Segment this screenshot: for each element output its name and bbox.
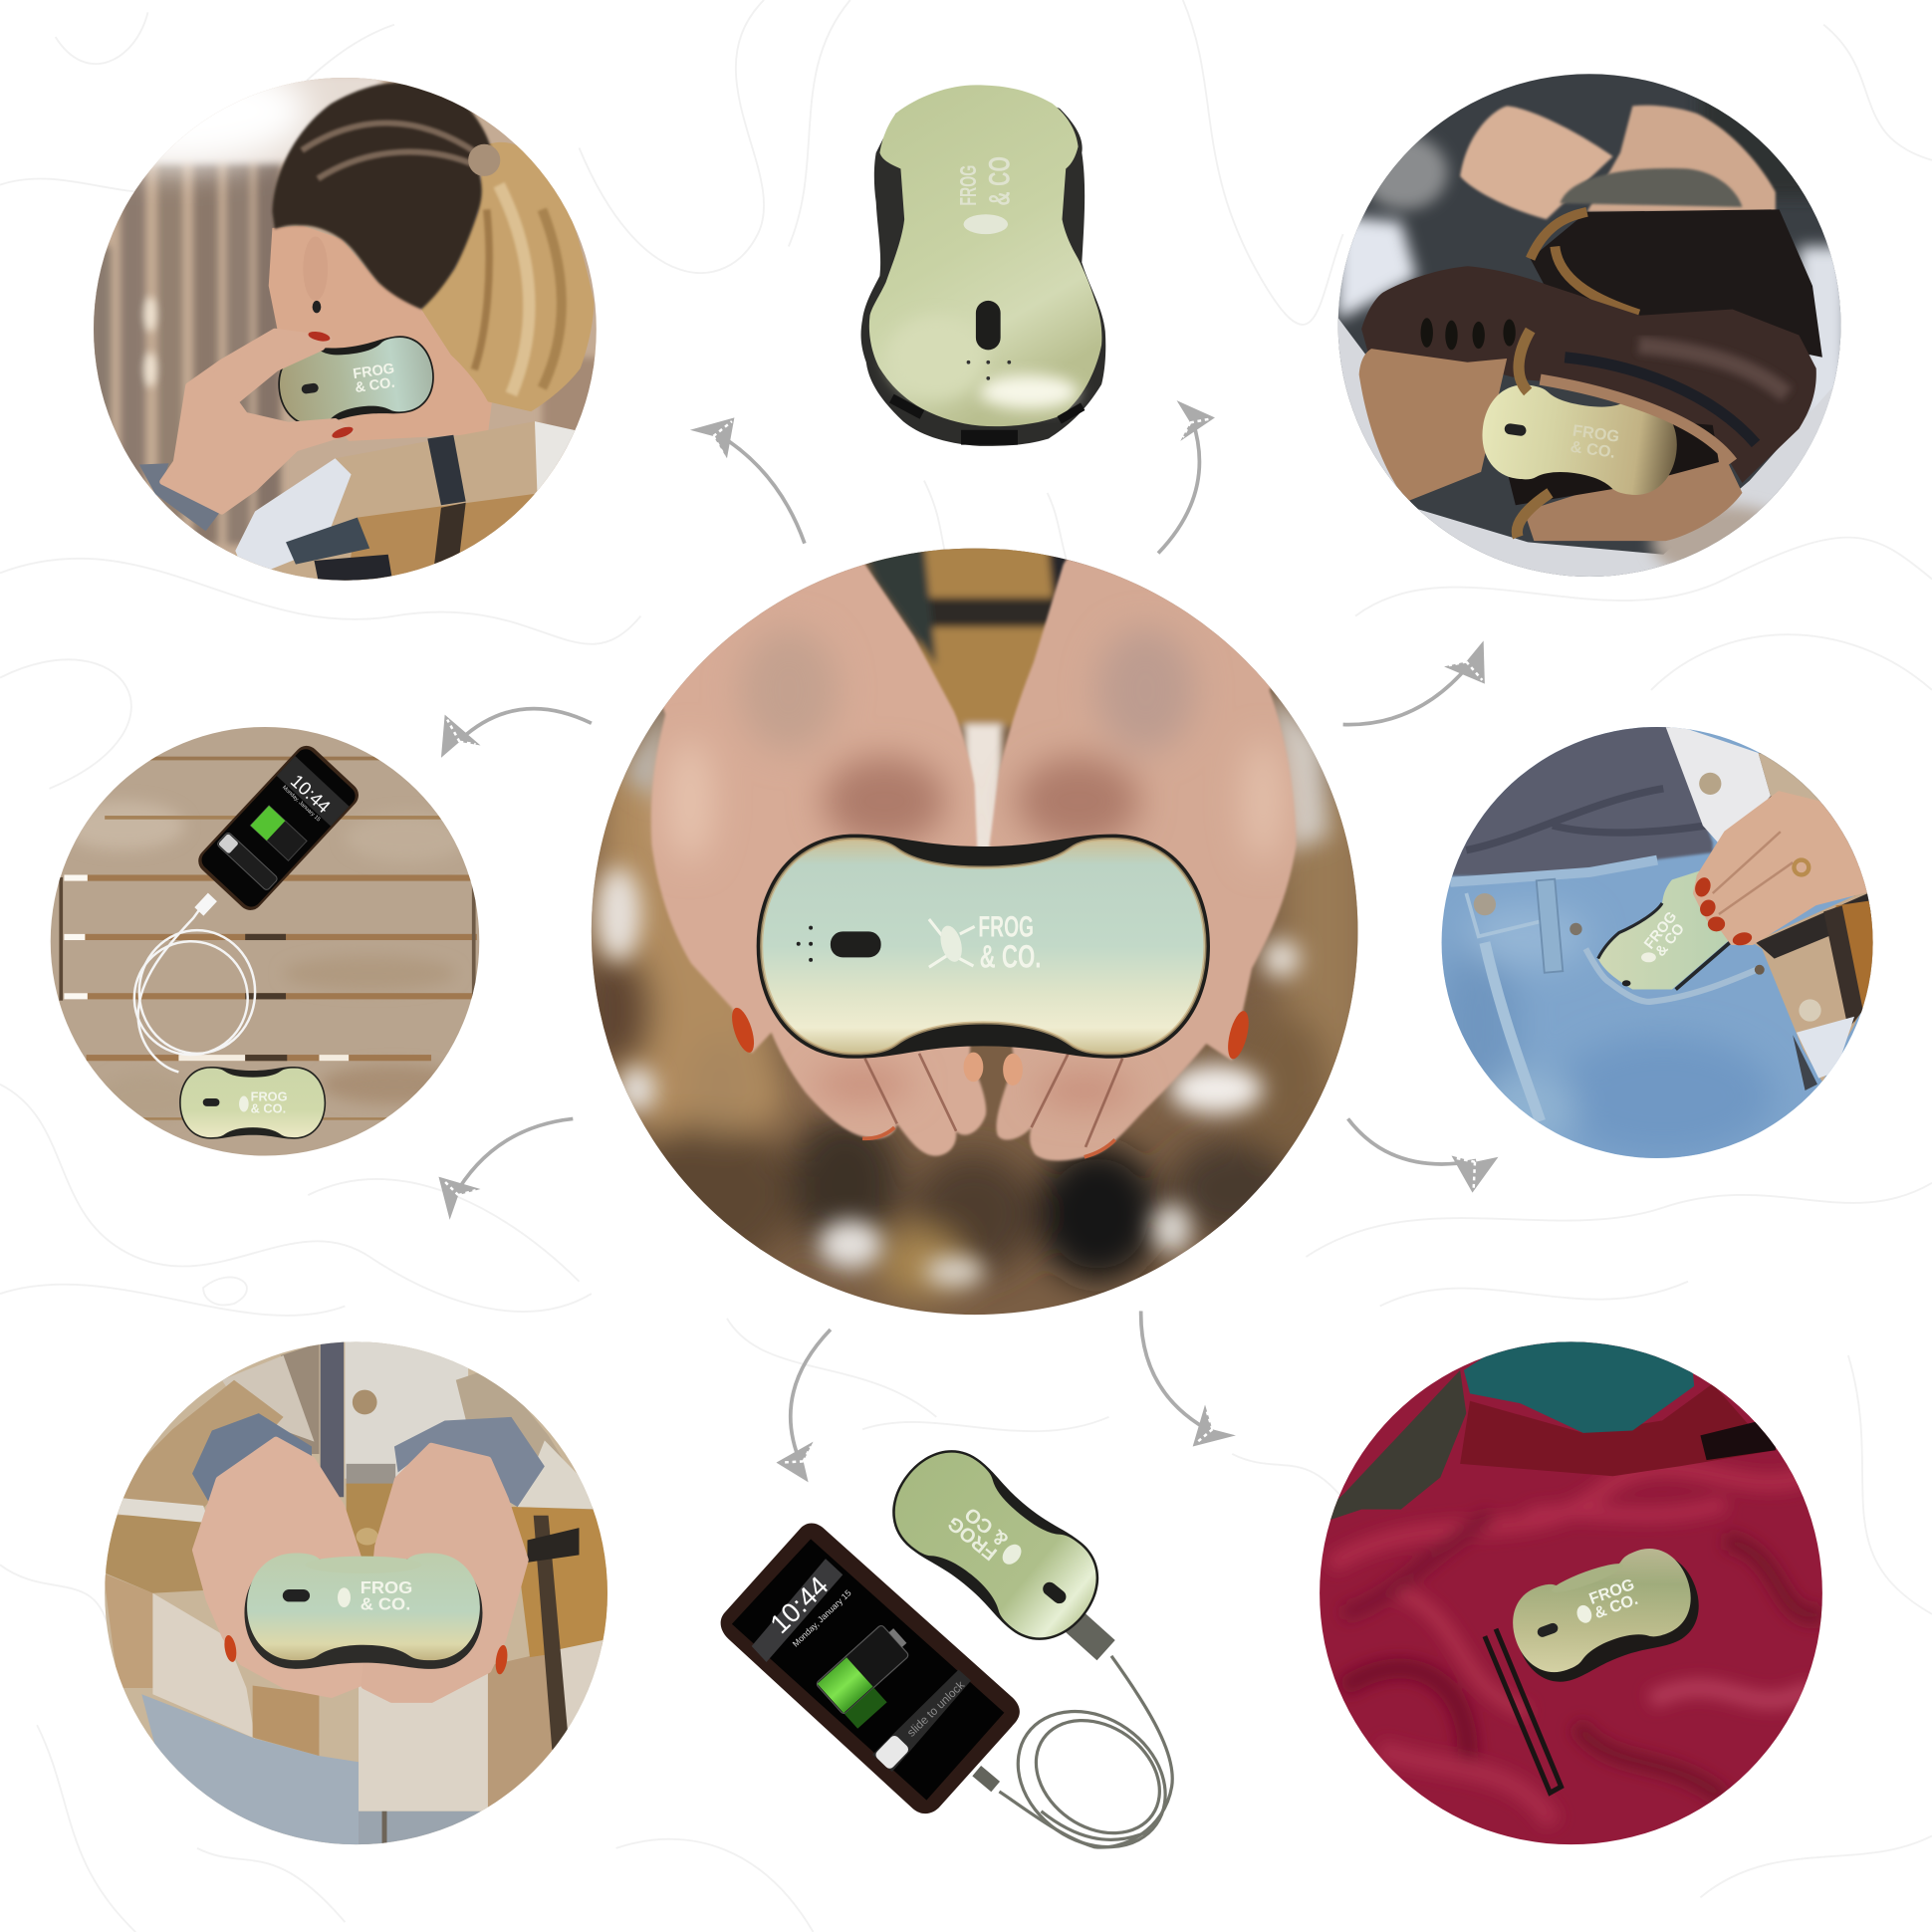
shirt center [345, 1336, 468, 1479]
logo: & CO. [980, 938, 1041, 974]
hand [162, 332, 352, 511]
arrow: center to sleeping bag [1141, 1311, 1236, 1447]
panel: warmer inside boots [1330, 68, 1848, 592]
logo: FROG [978, 910, 1034, 943]
insole left [1359, 349, 1507, 502]
button [976, 301, 1001, 350]
product: warmer in boot [1477, 379, 1683, 500]
panel: warmer in jeans pocket [1435, 721, 1885, 1164]
coat lower bands [104, 1510, 222, 1593]
product: warmer in boot: & CO. [1570, 438, 1616, 462]
unlock slider [873, 1734, 910, 1771]
tongues [1460, 106, 1613, 219]
arrow: center to hands [438, 1118, 573, 1220]
ponytail [421, 142, 594, 411]
panel: warmer in jeans pocket: FROG [1641, 909, 1680, 952]
right sleeve [456, 1367, 594, 1510]
panel: warmer in jeans pocket: & CO [1653, 921, 1688, 960]
jeans tone [1439, 905, 1775, 1158]
panel: warmer charging a phone [721, 1430, 1192, 1875]
cardigan [1663, 721, 1771, 847]
hand [1695, 794, 1868, 942]
arrow: center to charging [776, 1329, 831, 1482]
right hand [364, 1447, 525, 1699]
panel: center photo of hands holding warmer [580, 530, 1367, 1330]
upper boot [1531, 209, 1822, 358]
nails [732, 1008, 755, 1053]
strap [1485, 1629, 1562, 1793]
product: warmer on neck [278, 336, 434, 422]
fence [87, 74, 604, 545]
coat collar edge [535, 421, 576, 491]
blurred background [580, 727, 1367, 1298]
right hand [990, 530, 1306, 1161]
button [831, 931, 881, 957]
left hand [196, 1440, 362, 1694]
logo: & CO [983, 156, 1016, 206]
plaid coat behind [862, 542, 1085, 860]
product: warmer in hands: & CO. [361, 1594, 410, 1613]
product: warmer on bag: FROG [1586, 1575, 1637, 1608]
product: warmer on bag [1502, 1537, 1711, 1693]
panel: hands holding warmer in plaid coat [99, 1336, 616, 1860]
phone: slide to unlock [905, 1679, 967, 1740]
ear [303, 237, 328, 301]
product: warmer on table [179, 1067, 326, 1139]
arrow: center to boots [1343, 640, 1485, 725]
left sleeve [105, 1380, 284, 1516]
arrow: center to pocket [1348, 1118, 1498, 1193]
product: warmer on bag: & CO. [1592, 1590, 1640, 1622]
phone [721, 1524, 1020, 1813]
logo: FROG [955, 165, 981, 206]
plaid behind hand [1759, 753, 1885, 899]
neck and face [269, 225, 493, 441]
panel: warmer charging phone on wood table [43, 721, 493, 1170]
product: warmer in hands: FROG [361, 1577, 412, 1597]
plaid top [1759, 753, 1823, 814]
product: warmer in pocket [1598, 869, 1742, 990]
logo [928, 916, 1040, 968]
cuffs [192, 1413, 312, 1503]
phone: 10:44 [287, 770, 335, 817]
product: hand warmer [757, 835, 1210, 1059]
shirt [1435, 721, 1713, 887]
product: warmer on table: FROG [251, 1088, 288, 1103]
panel: warmer on red sleeping bag [1306, 1336, 1829, 1854]
phone: Monday, January 15 [281, 785, 322, 823]
product: warmer on neck: & CO. [354, 375, 396, 396]
left hand [640, 530, 986, 1156]
device: FROG [943, 1512, 1002, 1565]
logo [955, 156, 1016, 206]
product: warmer on table: & CO. [251, 1100, 286, 1115]
cable [119, 895, 264, 1072]
battery icon [816, 1620, 927, 1730]
laces [1517, 331, 1550, 537]
time: 10:44 [764, 1570, 835, 1639]
plank gaps [59, 757, 477, 1120]
nails [223, 1634, 238, 1663]
product: warmer on neck: FROG [352, 361, 395, 382]
panel: warmer at neck [94, 78, 597, 581]
arrow: center to table [441, 709, 592, 758]
pocket edge [1585, 949, 1760, 1002]
arrow: center to top product [1158, 400, 1215, 554]
jeans details [1450, 860, 1657, 882]
wood tones [62, 801, 468, 1121]
hand shading [668, 628, 1283, 1107]
product: warmer in boot: FROG [1571, 421, 1620, 446]
device [872, 1430, 1119, 1660]
usb ports [961, 430, 1018, 445]
battery [251, 806, 307, 860]
bag top folds [1460, 1383, 1776, 1476]
phone [193, 741, 363, 915]
dark base [861, 97, 1105, 446]
sock [1560, 168, 1742, 207]
cable [992, 1656, 1192, 1875]
device: & CO [961, 1503, 1013, 1551]
product: warmer in hands [244, 1554, 483, 1669]
snow [1330, 308, 1848, 592]
blurred backdrop [1336, 87, 1848, 518]
panel: top view of warmer [861, 85, 1105, 446]
plaid sleeve [1752, 889, 1879, 1082]
lower boot [1361, 266, 1816, 483]
metal face [869, 85, 1101, 426]
phone: Monday, January 15 [791, 1587, 853, 1649]
finger creases [865, 1054, 1122, 1147]
arrow: center to neck [690, 417, 805, 544]
boot lip [1541, 379, 1733, 462]
hair [272, 83, 492, 310]
lining bottom and interior [1524, 443, 1742, 541]
sleeve [139, 463, 220, 531]
white fade at top left [136, 81, 318, 191]
coat plaid [235, 422, 566, 581]
